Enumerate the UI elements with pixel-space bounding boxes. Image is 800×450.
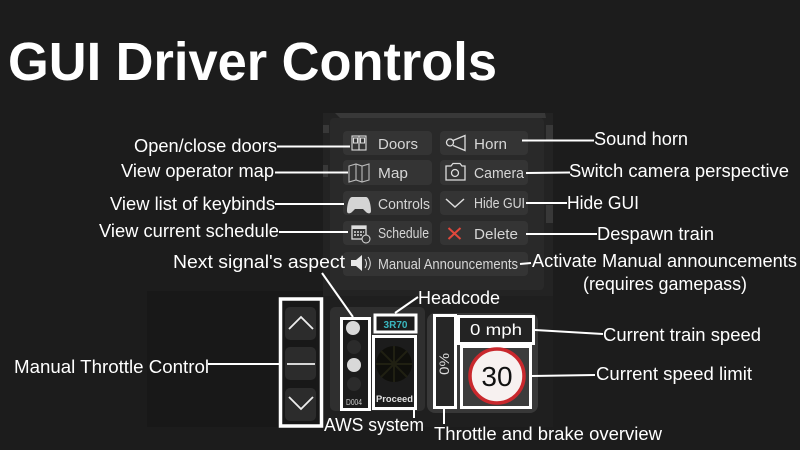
label: view operator map: View operator map bbox=[121, 161, 274, 181]
aws system bbox=[374, 336, 416, 408]
throttle control bbox=[280, 299, 322, 426]
button: controls: Controls bbox=[378, 196, 430, 213]
label: next signal aspect: Next signal's aspect bbox=[173, 252, 345, 272]
button: controls bbox=[343, 191, 432, 215]
button: delete: Delete bbox=[474, 226, 518, 243]
label: throttle and brake overview: Throttle and brake overview bbox=[434, 424, 663, 444]
label: view current schedule: View current schedule bbox=[99, 221, 279, 241]
button: map bbox=[343, 160, 432, 185]
button: delete bbox=[440, 221, 528, 245]
current speed: 0 mph bbox=[470, 322, 522, 339]
title: GUI Driver Controls bbox=[8, 32, 497, 92]
button: schedule: Schedule bbox=[378, 225, 429, 242]
button: manual announcements: Manual Announcements bbox=[378, 256, 518, 273]
button: hide gui: Hide GUI bbox=[474, 195, 525, 212]
button: map: Map bbox=[378, 165, 408, 182]
signal aspect bbox=[342, 318, 370, 410]
button: horn bbox=[440, 131, 528, 155]
label: view list of keybinds: View list of keybinds bbox=[110, 194, 275, 214]
label: aws system: AWS system bbox=[324, 415, 424, 435]
panel: cab display backdrop bbox=[323, 296, 553, 427]
label: open/close doors: Open/close doors bbox=[134, 136, 277, 156]
speed limit sign: 30 bbox=[481, 361, 513, 392]
throttle and brake bar bbox=[434, 316, 456, 408]
label: manual throttle control: Manual Throttle Control bbox=[14, 357, 209, 377]
label: hide gui: Hide GUI bbox=[567, 193, 639, 213]
label: sound horn: Sound horn bbox=[594, 129, 688, 149]
headcode: 3R70 bbox=[384, 320, 408, 331]
button: manual announcements bbox=[343, 252, 528, 276]
throttle and brake bar: 0% bbox=[436, 353, 452, 375]
panel: throttle backdrop bbox=[147, 291, 323, 427]
button: camera: Camera bbox=[474, 165, 525, 182]
panel: menu backdrop bbox=[323, 113, 553, 427]
button: doors: Doors bbox=[378, 136, 418, 153]
label: despawn train: Despawn train bbox=[597, 224, 714, 244]
button: schedule bbox=[343, 221, 432, 245]
label: activate manual announcements: Activate Manual announcements bbox=[532, 251, 797, 271]
label: headcode: Headcode bbox=[418, 288, 500, 308]
current speed bbox=[458, 316, 534, 344]
button: hide gui bbox=[440, 191, 528, 215]
signal aspect: D004 bbox=[346, 398, 362, 407]
button: camera bbox=[440, 160, 528, 185]
button: horn: Horn bbox=[474, 136, 507, 153]
label: current train speed: Current train speed bbox=[603, 325, 761, 345]
label: switch camera perspective: Switch camera perspective bbox=[569, 161, 789, 181]
label: activate manual announcements: (requires gamepass) bbox=[583, 274, 747, 294]
label: current speed limit: Current speed limit bbox=[596, 364, 752, 384]
button: doors bbox=[343, 131, 432, 155]
headcode bbox=[375, 315, 416, 332]
aws system: Proceed bbox=[376, 394, 413, 404]
callout lines bbox=[208, 140, 603, 424]
label: activate manual announcements bbox=[532, 251, 797, 294]
speed limit sign bbox=[462, 346, 530, 408]
